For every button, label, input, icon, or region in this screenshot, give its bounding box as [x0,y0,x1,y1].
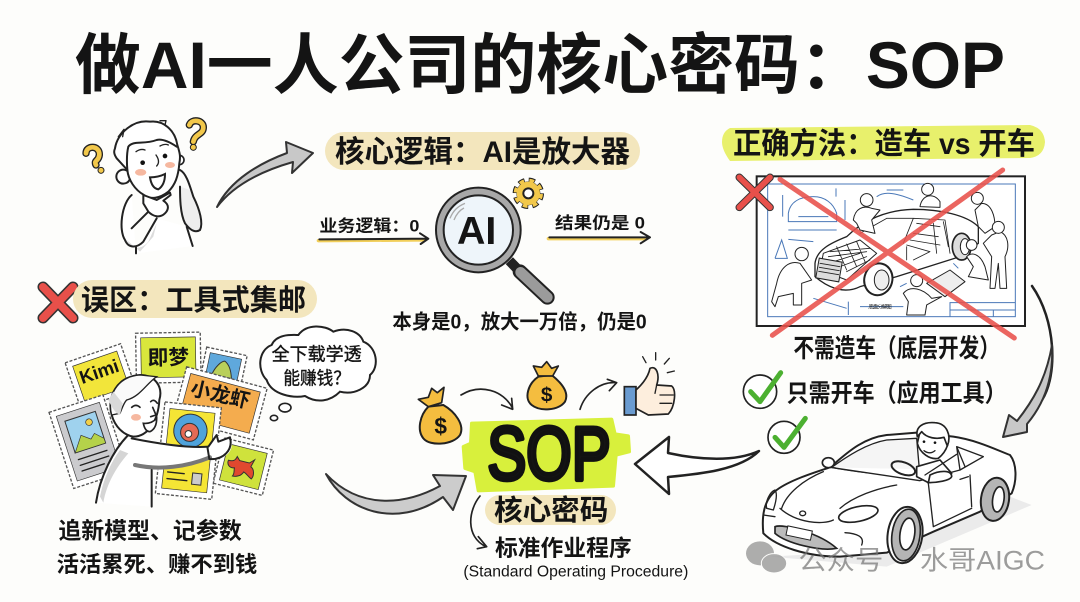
heading: mistakes: 误区：工具式集邮 [81,284,306,317]
caption: 本身是0，放大一万倍，仍是0 [392,310,647,334]
magnifier [436,188,547,297]
heading: right method: 正确方法：造车 vs 开车 [733,128,1035,161]
arrow: blueprint to car [1003,286,1052,437]
icon: thumbs up [624,353,675,415]
watermark: 公众号 [798,545,883,575]
stamp: orange Xiaolongxia: 小龙虾 [188,377,252,413]
stamp: orange Xiaolongxia [173,367,267,440]
central car [815,209,978,298]
magnifier: AI [457,209,496,253]
icon: money bag left: $ [434,413,447,439]
blueprint frame and sketches [768,184,1015,317]
driver [917,460,952,483]
front wheel [884,505,926,565]
caption: 活活累死、赚不到钱 [57,552,257,577]
stamp: blue small [200,347,247,390]
stamp: document [49,395,128,488]
definition: 标准作业程序 [495,535,632,561]
output arrow with label [548,213,650,243]
curved arrows around money [461,379,617,409]
workers [772,183,1008,315]
input arrow with label [318,216,428,244]
arrow: mistakes to SOP [326,474,466,514]
stamp: yellow app [155,402,221,499]
icon: money bag middle: $ [541,383,553,406]
thought bubble: 能赚钱？ [283,369,350,389]
stamp: Kimi [65,344,136,408]
panel: crossed-out car blueprint [739,170,1025,363]
title: 做AI一人公司的核心密码：SOP [75,28,1005,102]
diagram: AI magnifier amplifies zero [318,181,650,334]
thought bubble [260,326,376,421]
icon: money bag middle [527,362,566,409]
illustration: confused person with question marks [86,121,203,253]
input arrow with label: 业务逻辑：0 [319,216,419,235]
stamp: crab [213,438,274,495]
pill: core secret: 核心密码 [494,495,608,527]
output arrow with label: 结果仍是 0 [555,213,645,232]
caption: no need to build: 不需造车（底层开发） [793,335,1000,363]
curved arrow to definition [471,496,487,549]
blueprint frame and sketches: 底盘分解图 [868,302,892,310]
illustration: tool stamps collection [49,326,376,577]
heading: core logic: 核心逻辑：AI是放大器 [335,136,630,169]
watermark [746,541,1045,575]
icon: small red cross [739,177,770,207]
check item: only drive: 只需开车（应用工具） [787,378,1007,407]
stamp: Jimeng [136,332,201,383]
definition [463,535,688,581]
SOP core [418,353,688,581]
illustration: man driving convertible [763,423,1032,567]
icon: money bag left [418,387,461,444]
caption [57,518,257,577]
icon: gear [516,181,540,205]
caption: 追新模型、记参数 [58,518,242,544]
highlight with SOP text: SOP [487,411,611,495]
icon: large red cross for mistakes [43,287,73,318]
hugging person [96,375,232,507]
definition: (Standard Operating Procedure) [463,564,688,581]
stamp: Jimeng: 即梦 [147,346,190,370]
car section [743,373,1045,575]
check item: only drive [743,373,1007,408]
icon: check [768,418,805,453]
rear wheel [978,476,1012,523]
watermark: 水哥AIGC [920,545,1045,575]
thought bubble: 全下载学透 [272,345,362,365]
arrow: car to SOP [635,437,759,494]
arrow: person to core logic [217,142,313,207]
stamp: Kimi: Kimi [77,355,122,388]
big red cross [772,170,1014,338]
